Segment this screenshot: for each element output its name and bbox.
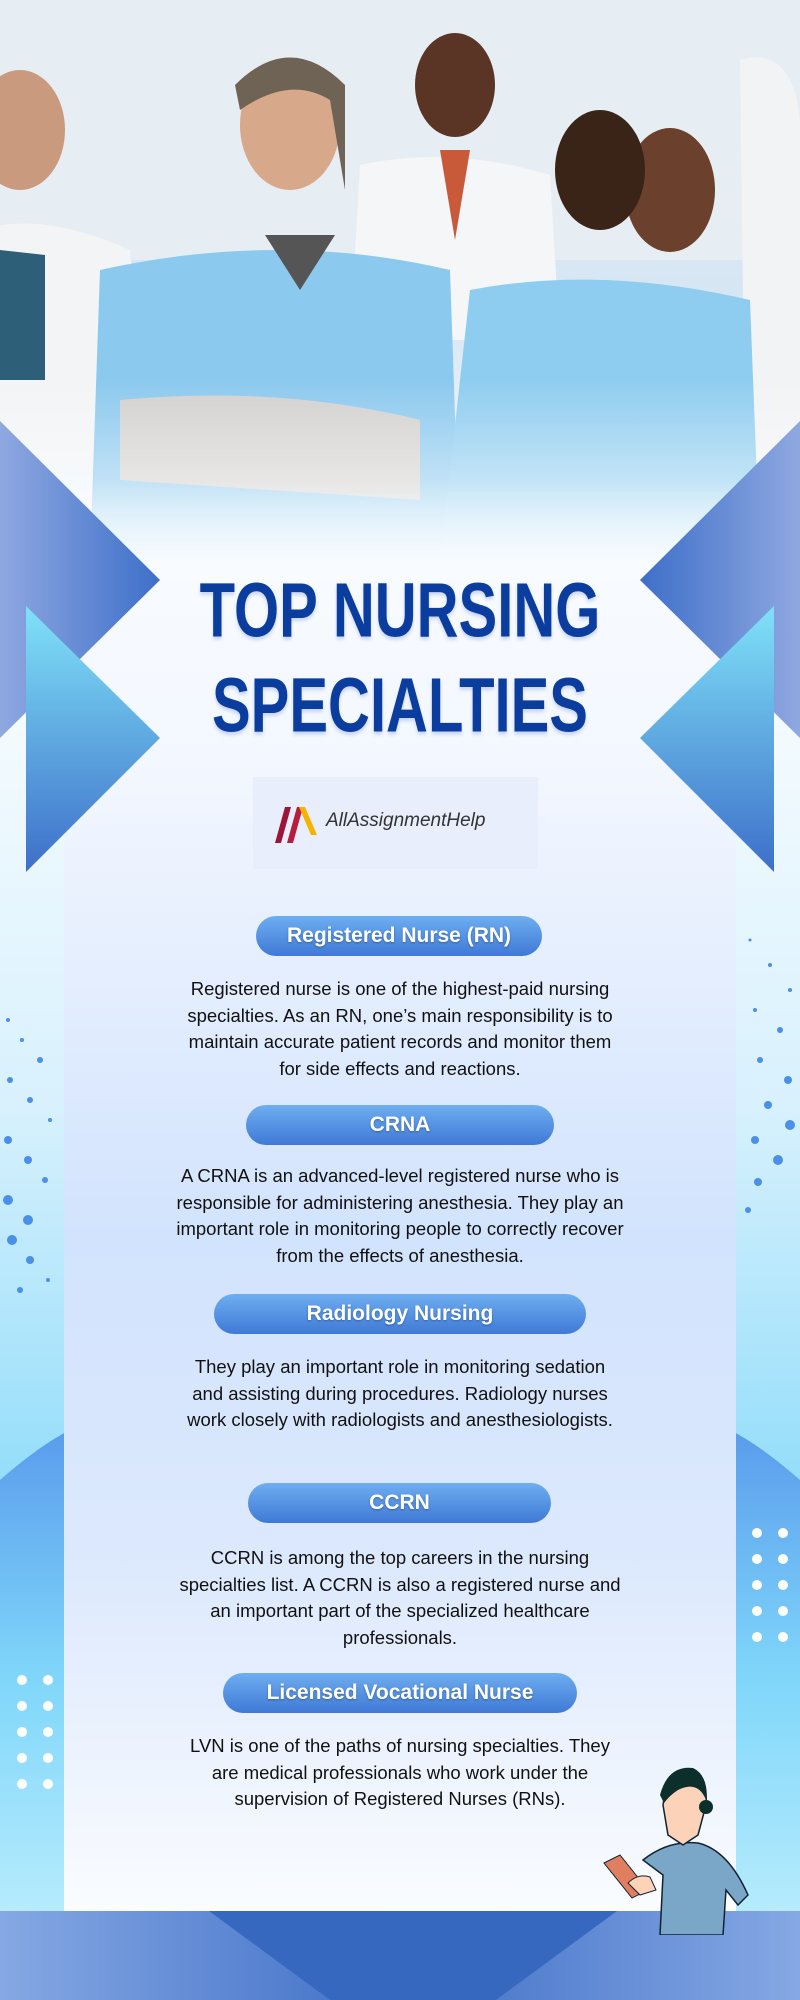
text: LVN: LVN is one of the paths of nursing specialties. They (190, 1735, 610, 1756)
dot pattern left halftone (3, 1018, 52, 1293)
title: SPECIALTIES (212, 663, 588, 749)
text: RN: maintain accurate patient records and monitor them (189, 1031, 611, 1052)
icon: nurse illustration (603, 1768, 749, 1935)
white panel fade into photo (64, 480, 736, 580)
dots right (752, 1528, 788, 1642)
pill: Radiology: Radiology Nursing (307, 1302, 493, 1325)
text: CCRN (179, 1547, 621, 1648)
logo (253, 777, 538, 869)
text: CRNA (176, 1165, 624, 1266)
text: CCRN: professionals. (343, 1627, 457, 1648)
text: RN: for side effects and reactions. (279, 1058, 521, 1079)
text: Radiology (187, 1356, 613, 1430)
text: CRNA: important role in monitoring people to correctly recover (176, 1218, 624, 1239)
text: LVN: supervision of Registered Nurses (RNs). (234, 1788, 566, 1809)
text: Radiology: work closely with radiologists and anesthesiologists. (187, 1409, 613, 1430)
text: CRNA: from the effects of anesthesia. (276, 1245, 524, 1266)
text: RN: specialties. As an RN, one’s main responsibility is to (187, 1005, 613, 1026)
text: CCRN: specialties list. A CCRN is also a registered nurse and (179, 1574, 621, 1595)
text: RN: Registered nurse is one of the highest-paid nursing (191, 978, 609, 999)
pill: CCRN: CCRN (369, 1491, 430, 1514)
main panel (64, 560, 736, 1912)
logo: AllAssignmentHelp (326, 810, 485, 831)
photo header (0, 0, 800, 600)
text: CRNA: responsible for administering anesthesia. They play an (176, 1192, 624, 1213)
pill: CRNA (246, 1105, 554, 1145)
text: Radiology: They play an important role in monitoring sedation (195, 1356, 605, 1377)
text: CCRN: CCRN is among the top careers in the nursing (211, 1547, 589, 1568)
pill: LVN: Licensed Vocational Nurse (267, 1681, 533, 1704)
decorative side arcs (0, 1433, 800, 1846)
pill: RN (256, 916, 542, 956)
left triangles (0, 421, 160, 872)
background side gradient (0, 560, 800, 1920)
pill: Radiology (214, 1294, 586, 1334)
text: LVN (190, 1735, 610, 1809)
pill: RN: Registered Nurse (RN) (287, 924, 511, 947)
text: LVN: are medical professionals who work under the (212, 1762, 588, 1783)
title: TOP NURSING (200, 568, 600, 654)
text: RN (187, 978, 613, 1079)
pill: CRNA: CRNA (370, 1113, 430, 1136)
text: CCRN: an important part of the specialized healthcare (210, 1600, 590, 1621)
right triangles (640, 421, 800, 872)
text: CRNA: A CRNA is an advanced-level registered nurse who is (181, 1165, 619, 1186)
dot pattern right halftone (745, 938, 795, 1213)
bottom band (0, 1911, 800, 2000)
text: Radiology: and assisting during procedures. Radiology nurses (192, 1383, 608, 1404)
dots left (17, 1675, 53, 1789)
title (199, 568, 600, 749)
pill: CCRN (248, 1483, 551, 1523)
pill: LVN (223, 1673, 577, 1713)
